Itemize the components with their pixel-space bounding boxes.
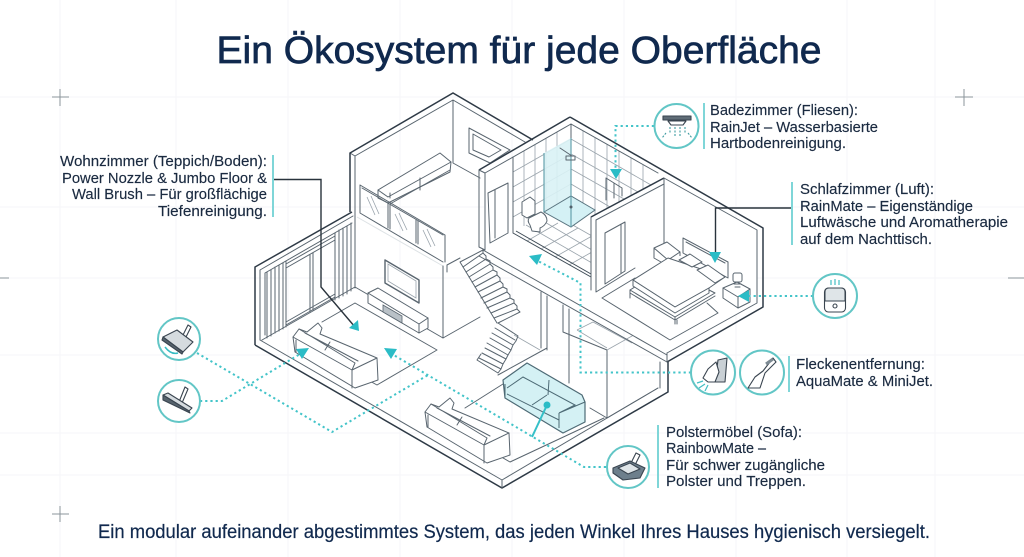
sofa left	[293, 323, 378, 388]
bathroom door	[488, 183, 508, 243]
bedroom	[479, 117, 763, 362]
title: Ein Ökosystem für jede Oberfläche	[216, 30, 822, 72]
label: Polstermöbel: Polster und Treppen.	[666, 473, 806, 490]
icon: RainbowMate	[607, 446, 649, 488]
icon: humidifier	[813, 274, 857, 318]
isometric house illustration	[255, 93, 763, 488]
label: Fleckenentfernung: AquaMate & MiniJet.	[796, 373, 933, 390]
footer statement: Ein modular aufeinander abgestimmtes System, das jeden Winkel Ihres Hauses hygienisch versiegelt.	[98, 522, 930, 543]
highlighted sofa	[503, 363, 585, 433]
label: Wohnzimmer: Wall Brush – Für großflächige	[72, 186, 267, 203]
label: Wohnzimmer: Wohnzimmer (Teppich/Boden):	[60, 153, 267, 170]
nightstand right and lamp	[723, 273, 750, 308]
dotted connector: RainbowMate	[384, 348, 606, 467]
label: Schlafzimmer: RainMate – Eigenständige	[800, 198, 973, 215]
label: Polstermöbel: Für schwer zugängliche	[666, 457, 825, 474]
label: Polstermöbel: RainbowMate –	[666, 440, 767, 457]
connector: bedroom	[709, 208, 792, 263]
dotted connector: AquaMate and MiniJet	[529, 254, 691, 372]
label: Schlafzimmer: auf dem Nachttisch.	[800, 231, 932, 248]
upper right floor plate	[479, 124, 757, 362]
dotted connector: Jumbo Floor Brush	[200, 348, 309, 401]
label: Wohnzimmer: Power Nozzle & Jumbo Floor &	[62, 170, 267, 187]
tv console	[368, 288, 428, 333]
dotted connector: humidifier	[738, 290, 813, 302]
shower	[544, 138, 595, 227]
connector: sofa marker	[532, 402, 550, 437]
label: Fleckenentfernung	[788, 356, 933, 392]
shelf on mezzanine	[378, 153, 451, 211]
toilet	[522, 197, 547, 232]
label: Fleckenentfernung: Fleckenentfernung:	[796, 356, 925, 373]
icon: RainJet sprayer	[654, 104, 698, 148]
icon: MiniJet	[740, 350, 784, 394]
ground floor slab and walls	[255, 212, 668, 488]
icon: AquaMate	[691, 350, 735, 394]
dotted connector: RainJet	[610, 126, 654, 179]
living room rug	[322, 303, 437, 385]
wall below mezzanine	[443, 258, 460, 338]
label: Schlafzimmer: Luftwäsche und Aromatherapie	[800, 214, 1008, 231]
railing	[360, 185, 445, 262]
icon: Power Nozzle	[158, 318, 200, 360]
upper room walls	[350, 93, 533, 287]
label: Badezimmer	[703, 102, 878, 152]
bathroom	[513, 124, 651, 277]
television	[385, 260, 419, 303]
connector: living room	[273, 180, 359, 331]
light band under railing	[357, 217, 443, 266]
label: Schlafzimmer: Schlafzimmer (Luft):	[800, 181, 934, 198]
bed	[630, 254, 725, 324]
label: Polstermöbel: Polstermöbel (Sofa):	[666, 424, 802, 441]
label: Badezimmer: Badezimmer (Fliesen):	[710, 102, 858, 119]
label: Wohnzimmer: Tiefenreinigung.	[158, 203, 267, 220]
label: Badezimmer: Hartbodenreinigung.	[710, 135, 846, 152]
bedroom rug	[602, 278, 718, 340]
label: Badezimmer: RainJet – Wasserbasierte	[710, 119, 878, 136]
dotted connector: Power Nozzle	[197, 353, 428, 432]
icon: Jumbo Floor Brush	[158, 380, 200, 422]
nightstand left	[654, 242, 680, 266]
label: Schlafzimmer	[791, 181, 1008, 248]
headboard	[683, 238, 728, 278]
bedroom door	[605, 222, 625, 284]
staircase	[460, 250, 520, 373]
label: Wohnzimmer	[60, 153, 274, 220]
sofa front	[425, 398, 510, 463]
label: Polstermöbel	[657, 424, 825, 490]
towel rail	[606, 178, 622, 200]
